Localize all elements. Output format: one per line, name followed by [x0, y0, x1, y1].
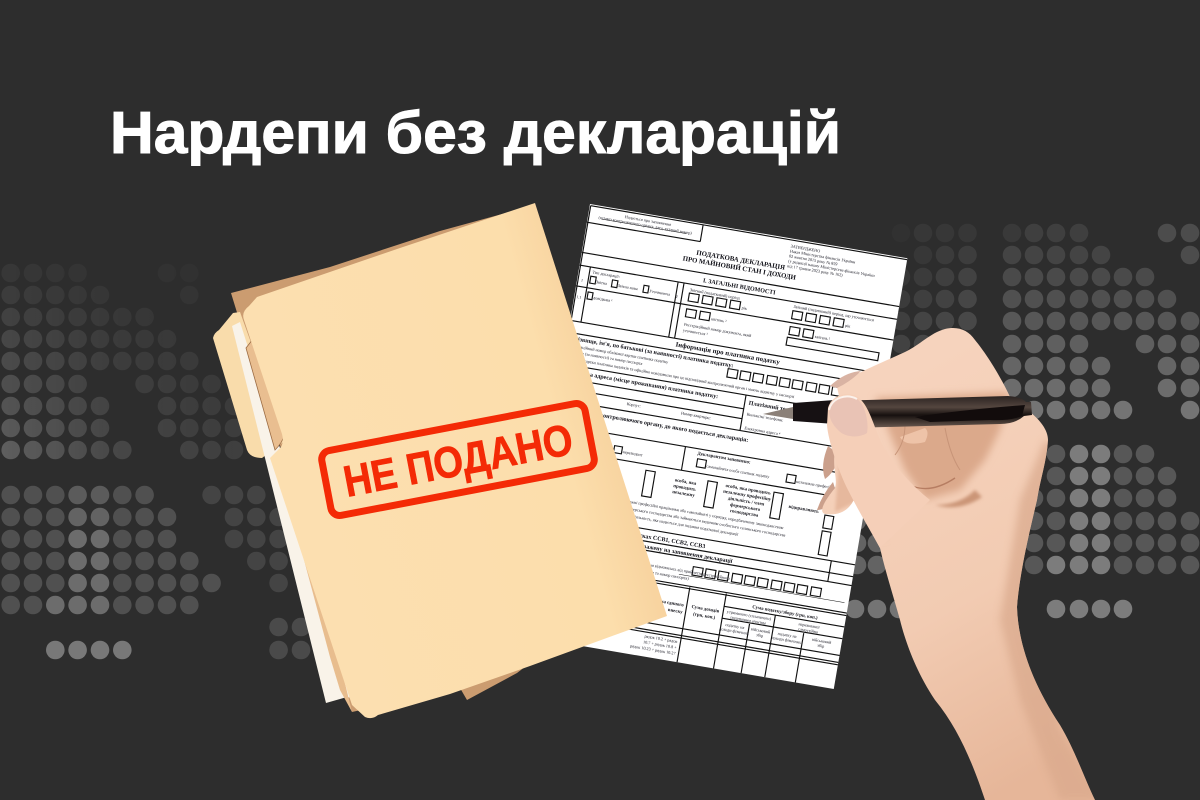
hand shape — [822, 328, 1095, 800]
title: Нардепи без декларацій — [110, 100, 841, 166]
form text: Звітна нова — [617, 283, 638, 291]
form text: 1 — [581, 278, 584, 283]
form text: Звітний (податковий) період — [690, 287, 741, 301]
form text: Сума доходів — [691, 605, 720, 615]
form text: податку на — [777, 631, 797, 639]
form text: Сума податку/збору (грн, коп.) — [752, 605, 818, 621]
form text: Сума єдиного — [654, 599, 685, 609]
form text: утриманого (сплаченого) — [727, 609, 772, 621]
form text: (уповноважена особа) — [562, 540, 602, 552]
form text: фізичної особи, яка через свої релігійні переконання відмовилась від прийняття реєстраційного — [561, 547, 730, 582]
form text: діяльність / член — [727, 496, 765, 508]
form text: збір — [756, 632, 764, 638]
form table lines — [516, 205, 907, 689]
form text: (штамп контролюючого органу, дата, вхідний номер) — [598, 215, 693, 237]
form text: Платіжний телефон: — [748, 400, 805, 416]
folder inner dark tab — [246, 330, 284, 450]
form text: від 17 травня 2023 року № 162) — [787, 263, 844, 278]
form text: особа, яка — [674, 478, 697, 487]
form text: Номер квартири: — [681, 410, 711, 420]
form text: Надається про заповнення — [624, 214, 672, 227]
form text: Інформація про платника податку — [675, 341, 781, 366]
palm fold lines — [902, 478, 955, 489]
form text: Декларантом заповнено: — [697, 452, 751, 466]
form text: 1.1 — [576, 294, 582, 300]
form text: Податкова адреса (місце проживання) платника податку: — [564, 367, 719, 400]
form text: рядок 10.2 + рядок — [644, 633, 679, 644]
form text: Звітна — [596, 279, 608, 286]
form text: податку на — [725, 622, 745, 630]
form text: 02 жовтня 2015 року № 859 — [789, 253, 838, 267]
form text: Статус платника податку: — [554, 429, 606, 443]
form text: 2 — [675, 294, 678, 299]
form text: нерезидент — [622, 449, 643, 457]
form text: І. ЗАГАЛЬНІ ВІДОМОСТІ — [702, 278, 776, 297]
form text: Тип декларації: — [592, 269, 620, 279]
form text: відповідно до договору про спільну діяльність, яка надається для подання податкової декларації — [568, 503, 740, 538]
form text: (у редакції наказу Міністерства фінансів України — [788, 258, 876, 278]
form text: рік — [845, 323, 852, 329]
form text: довідкова ¹ — [593, 295, 614, 303]
form text: (грн, коп.) — [693, 612, 716, 621]
form text: Сума єдиного внеску у додатках ССВ1, ССВ2, ССВ3 — [565, 521, 706, 550]
hand shading — [835, 392, 1100, 800]
form text: ЗАТВЕРДЖЕНО — [790, 243, 821, 253]
curled finger nails — [823, 446, 840, 479]
folder back flap — [231, 205, 560, 712]
form text: незалежну професійну — [723, 490, 772, 503]
form text: доходи фізичних — [771, 635, 802, 645]
inner sheet edge — [232, 322, 360, 703]
form text: самозайнята особа платник податку — [706, 463, 771, 479]
form text: Контактні телефони: — [746, 411, 784, 423]
form checkboxes — [544, 276, 884, 600]
form text: доходи фізичних — [719, 626, 750, 636]
form text: збір — [817, 643, 825, 649]
form text: Реєстраційний номер документа, який — [684, 322, 753, 339]
form text: внеску — [667, 608, 683, 615]
dotted world map pattern — [1, 224, 1199, 659]
form text: облікової картки платника податків та офіційно повідомили про це відповідний контролюючий орган і мають відмітку у паспорті — [566, 355, 796, 399]
form text: провадить — [673, 484, 697, 493]
form text: Найменування контролюючого органу, до якого подається декларація: — [558, 405, 749, 444]
folder left tab — [213, 312, 286, 458]
form text: рядок 10.23 + рядок 10.27 — [630, 643, 676, 656]
form text: рік — [741, 305, 748, 311]
pen body — [830, 396, 1032, 428]
form text: 10.7 + рядок 10.8 + — [643, 639, 678, 650]
thumb — [827, 394, 930, 548]
form text: Інформація про особу, уповноважену на заповнення декларації — [564, 529, 733, 565]
form text: військовий — [751, 626, 771, 635]
form text: Уточнююча — [649, 288, 671, 297]
form text: квітень ² — [711, 316, 728, 324]
index finger nail — [830, 371, 861, 388]
thumb nail — [829, 396, 868, 436]
form text: особи, які зареєстровані як незалежні професійні працівники або самозайняті у порядку, передбаченому законодавством — [571, 489, 784, 531]
form text: Звітний (податковий) період, що уточнюється — [793, 304, 875, 323]
form text: Прізвище, ім'я, по батькові (за наявності) платника податку: — [570, 335, 734, 369]
form text: ПОДАТКОВА ДЕКЛАРАЦІЯ — [696, 250, 785, 272]
form text: квітень ² — [815, 334, 831, 341]
pen dark stripe — [915, 405, 1025, 422]
form text: податковим агентом — [730, 615, 767, 626]
form text: самостійно — [798, 626, 819, 635]
form text: нарахованої — [798, 621, 821, 630]
form text: господарства — [729, 509, 759, 519]
form text: уточнюється ³ — [683, 328, 709, 337]
form text: відправляють — [788, 505, 819, 515]
form text: особа, яка провадить — [725, 484, 771, 497]
form text: фермерського — [730, 503, 761, 513]
tax declaration form — [516, 204, 907, 689]
form text: номера облікової картки платника податків (або серія та номер паспорта) — [560, 554, 690, 581]
form text: або серія (за наявності) та номер паспорта — [568, 348, 643, 366]
form text: Електронна адреса ⁴ — [744, 425, 781, 436]
form text: незалежна професійна — [796, 479, 836, 490]
form text: Реєстраційний номер облікової картки платника податку — [569, 343, 670, 365]
form text: ПРО МАЙНОВИЙ СТАН І ДОХОДИ — [682, 254, 797, 282]
stamp: НЕ ПОДАНО: НЕ ПОДАНО — [340, 415, 577, 507]
form text: Наказ Міністерства фінансів України — [790, 248, 857, 265]
form text: Корпус: — [626, 401, 641, 408]
folder front — [243, 203, 667, 718]
form text: військовий — [812, 637, 833, 645]
form text: особи, які мають статус члена фермерського господарства або займаються веденням особистого селянського господарства — [570, 496, 786, 539]
form text: Індекс — [564, 380, 576, 387]
pen grip — [763, 407, 793, 419]
form text: незалежну — [672, 490, 696, 499]
form text — [519, 208, 897, 681]
hand with pen — [763, 328, 1100, 800]
